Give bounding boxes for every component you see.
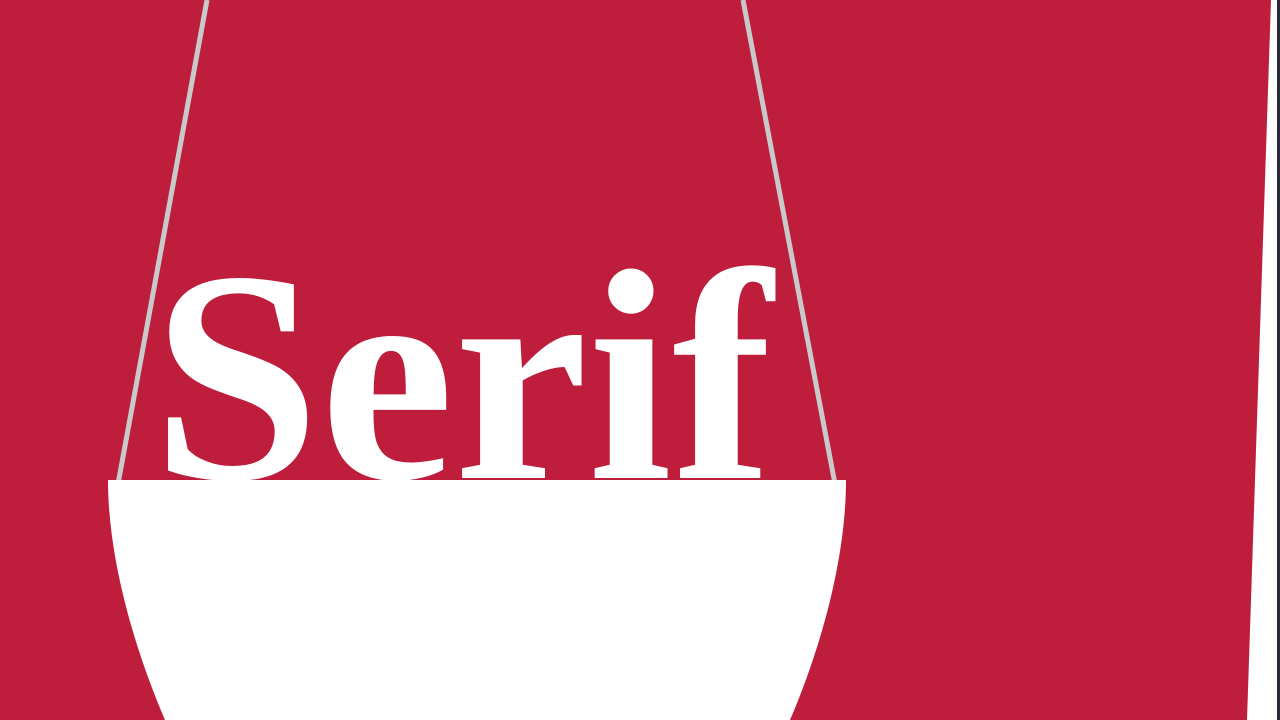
scale bowl <box>108 480 846 720</box>
scale strings <box>118 0 835 484</box>
title: Serif: Serif <box>152 210 776 544</box>
right edge white sliver <box>1247 0 1280 720</box>
